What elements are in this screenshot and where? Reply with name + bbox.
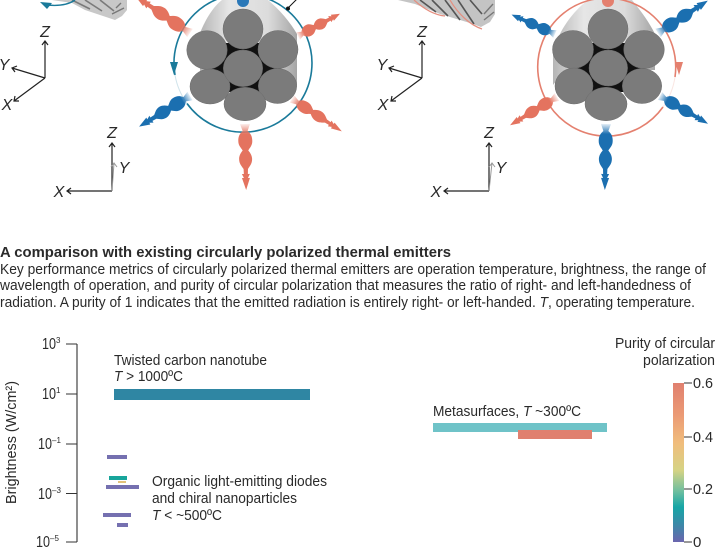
bars: organic LEDs and chiral nanoparticles [103,455,139,527]
heading: A comparison with existing circularly polarized thermal emitters [0,244,451,261]
illustration: left twisted cable [40,0,127,20]
y axis with ticks: 10 [38,486,52,503]
axes: right front XYZ: Z [483,125,495,142]
label: twisted carbon nanotube [114,352,267,385]
cross section: left strands and polarization ring [170,0,312,132]
axes: right oblique XYZ: Z [416,24,428,41]
axes: left oblique XYZ: Z [39,24,51,41]
text block: description [0,261,707,311]
bars: metasurfaces [433,423,607,439]
axes: left front XYZ: X [53,184,66,201]
legend title [615,335,715,369]
y axis with ticks: –5 [50,534,59,543]
y axis with ticks: 10 [42,336,56,353]
y axis with ticks [36,336,77,550]
waves: right circularly polarized emission [507,0,712,190]
axes: left front XYZ: Z [106,125,118,142]
label: organic LEDs and chiral nanoparticles: T < ~500ºC [152,507,222,524]
axes: left front XYZ [53,125,131,201]
axes: right oblique XYZ: Y [377,57,389,74]
cross section: right strands and polarization ring [538,0,683,136]
label: twisted carbon nanotube: T > 1000ºC [114,368,183,385]
bar: twisted carbon nanotube [114,389,310,400]
label: organic LEDs and chiral nanoparticles [152,473,327,524]
axes: left front XYZ: Y [119,160,131,177]
label: twisted carbon nanotube: Twisted carbon nanotube [114,352,267,369]
y axis title: Brightness (W/cm²) [3,381,20,504]
panel: right carbon nanotube emitter diagram [377,0,712,201]
y axis with ticks: 10 [42,386,56,403]
axes: left oblique XYZ [0,24,51,114]
illustration: right twisted cable [398,0,495,29]
text block: description: radiation. A purity of 1 indicates that the emitted radiation is entirely right- or left-handed. T, operating temperature. [0,294,695,311]
scale ticks and labels: 0.6 [693,375,713,392]
y axis with ticks: –3 [52,486,61,495]
label: organic LEDs and chiral nanoparticles: Organic light-emitting diodes [152,473,327,490]
label: organic LEDs and chiral nanoparticles: and chiral nanoparticles [152,490,297,507]
axes: right front XYZ: Y [496,160,508,177]
axes: right front XYZ [430,125,508,201]
chart: brightness comparison [3,336,607,550]
axes: right oblique XYZ [377,24,428,114]
waves: left circularly polarized emission [131,0,345,190]
scale ticks and labels [684,375,713,550]
y axis with ticks: –1 [52,436,61,445]
scale ticks and labels: 0.2 [693,481,713,498]
y axis with ticks: 3 [56,336,61,345]
axes: right front XYZ: X [430,184,443,201]
legend: purity of circular polarization [615,335,715,550]
y axis with ticks: 1 [56,386,61,395]
scale ticks and labels: 0.4 [693,429,713,446]
panel: left carbon nanotube emitter diagram [0,0,345,201]
axes: left oblique XYZ: X [1,97,14,114]
color scale bar [673,383,684,542]
axes: right oblique XYZ: X [377,97,390,114]
label: metasurfaces: Metasurfaces, T ~300ºC [433,403,581,420]
y axis with ticks: 10 [38,436,52,453]
